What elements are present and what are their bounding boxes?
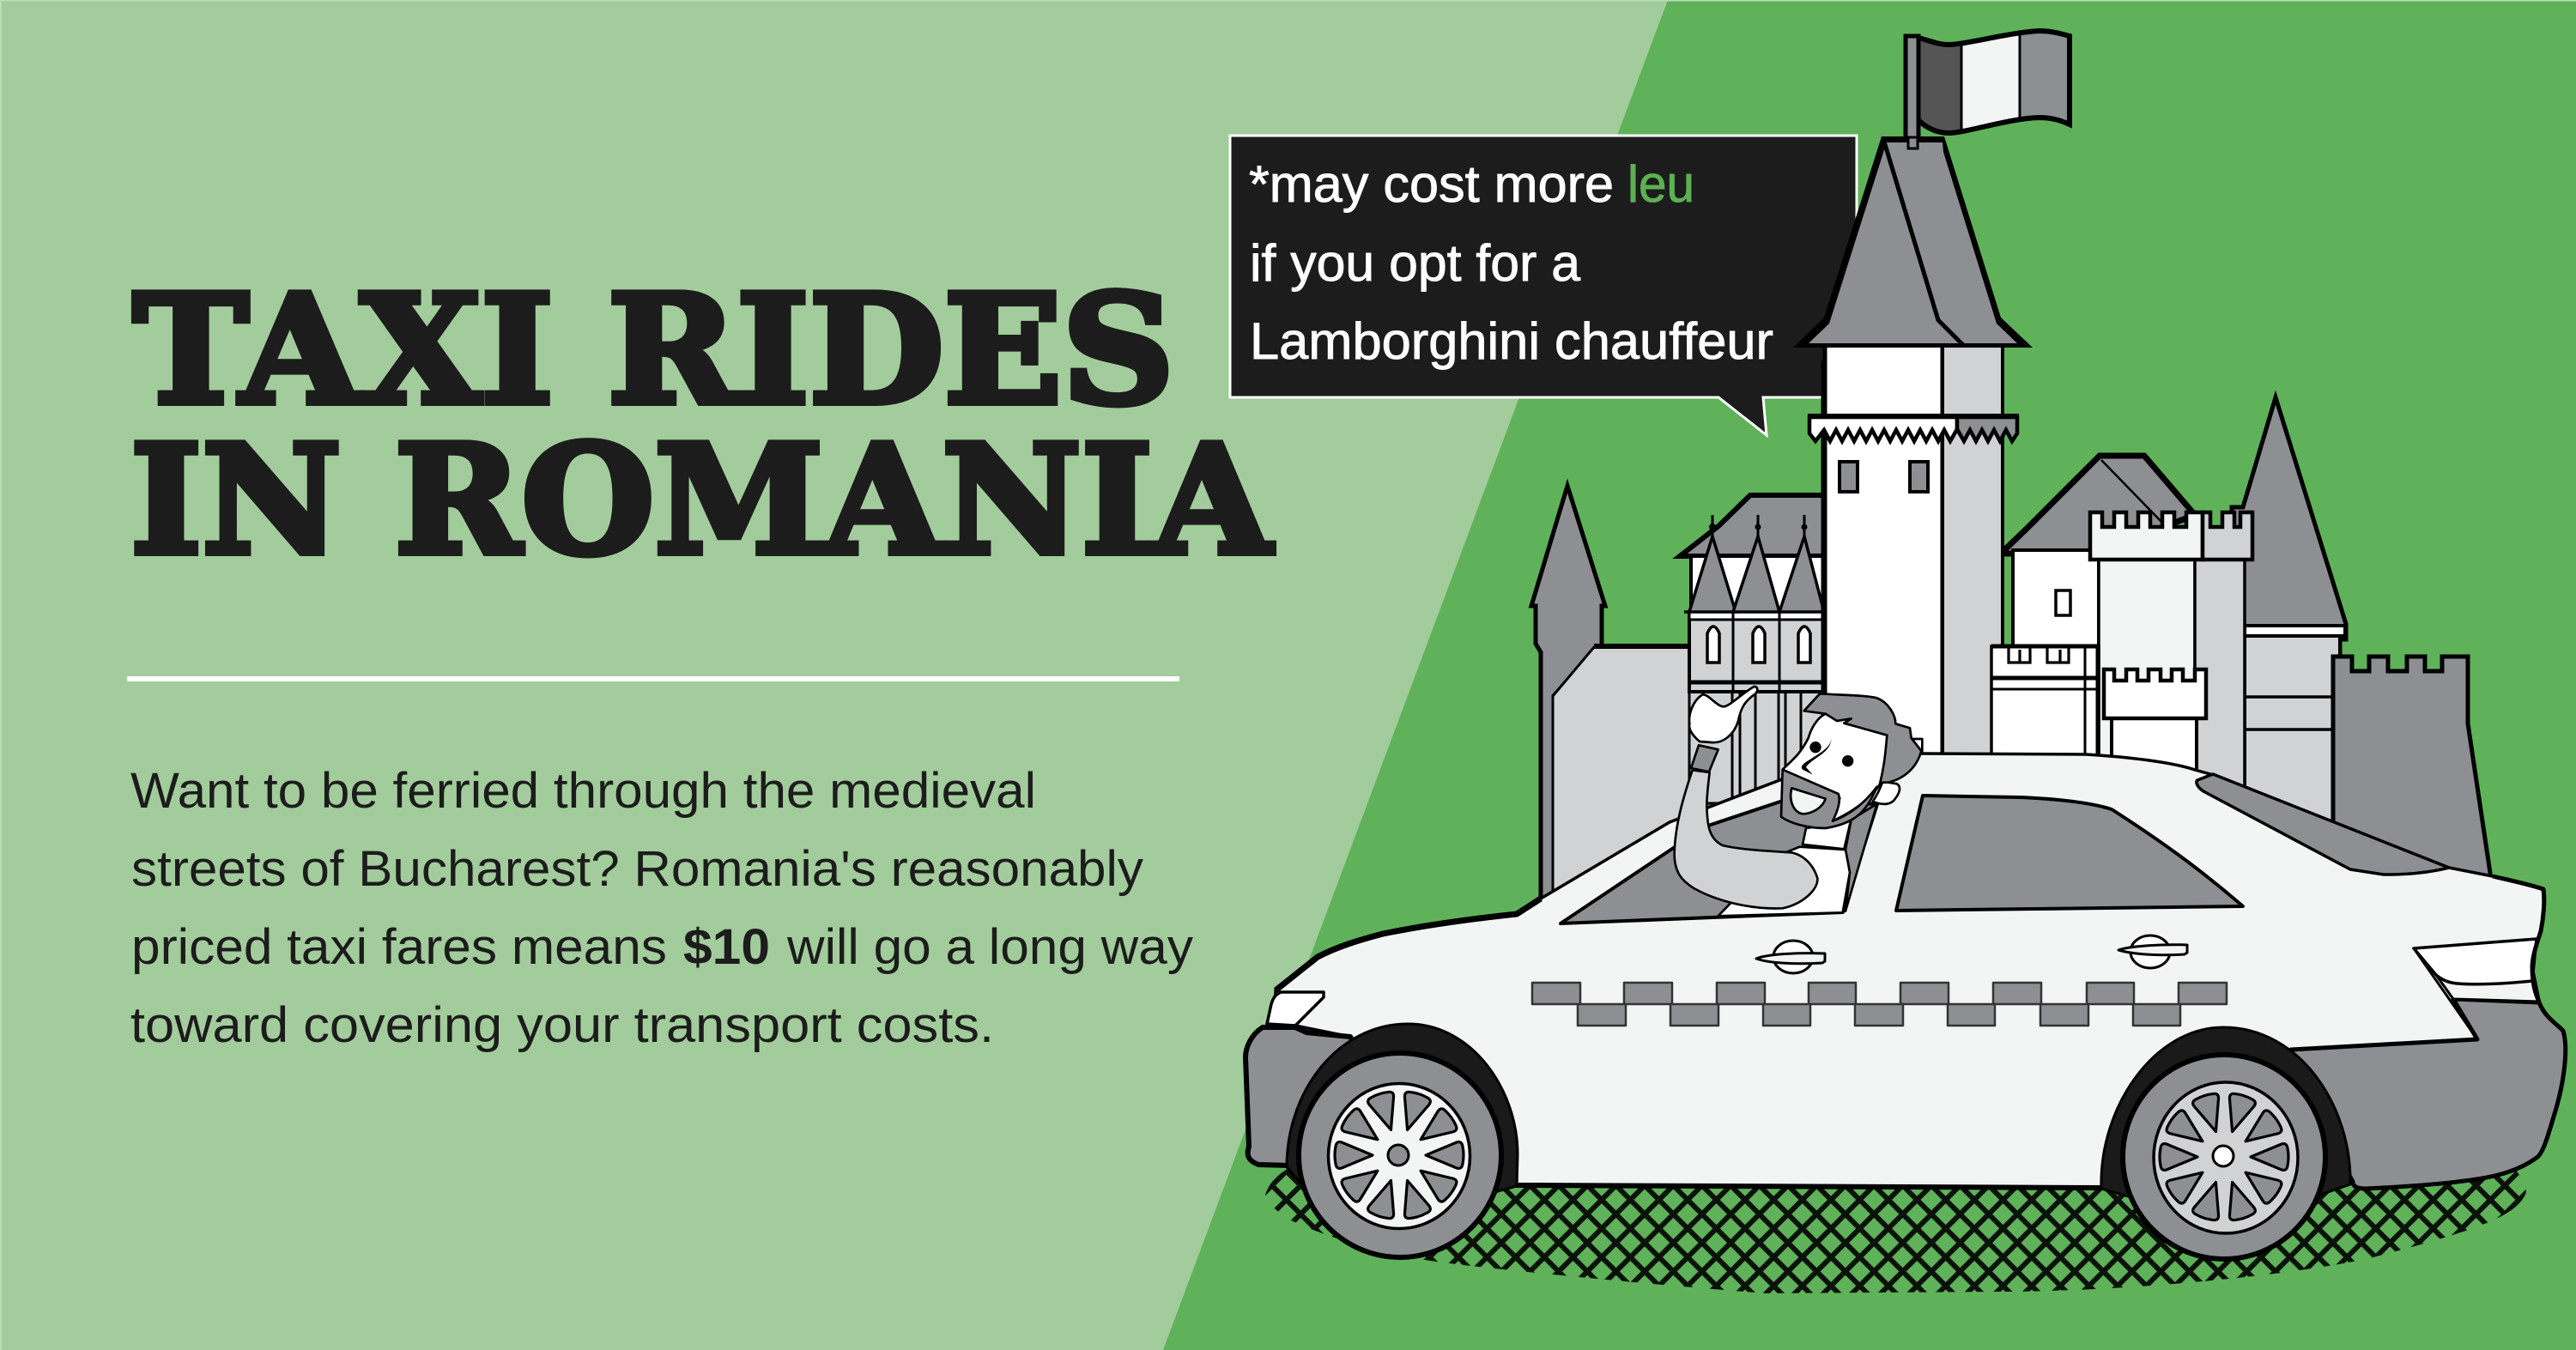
door handle rear — [2118, 935, 2187, 968]
callout — [1230, 136, 1857, 435]
seat — [1846, 804, 1877, 911]
small white crenellated turret — [2104, 669, 2206, 786]
face — [1783, 714, 1887, 821]
right wall band and lower wall — [2245, 626, 2345, 876]
castle — [1531, 31, 2490, 910]
car body — [1267, 754, 2544, 1187]
body text: toward covering your transport costs. — [130, 997, 994, 1053]
lower crenellated wall — [1991, 645, 2099, 772]
rear wheel arch — [2101, 1027, 2350, 1202]
ground hatch — [1262, 1167, 2532, 1296]
shirt — [1718, 847, 1850, 916]
body text: Want to be ferried through the medieval — [130, 763, 1036, 819]
body text: streets of Bucharest? Romania's reasonably — [131, 841, 1143, 897]
taxi car — [1246, 754, 2566, 1259]
body text: $10 — [683, 919, 770, 975]
body text — [130, 763, 1193, 1053]
crenellated shaft — [2090, 512, 2252, 800]
rear side window — [1896, 796, 2243, 911]
beard — [1781, 770, 1877, 828]
front wheel arch — [1287, 1024, 1518, 1202]
tower band — [1808, 416, 2019, 441]
columns — [1689, 692, 1824, 824]
three small turrets — [1684, 515, 1824, 692]
thumbs-up hand — [1689, 687, 1757, 742]
callout text: leu — [1627, 155, 1694, 213]
taxi checker stripe — [1532, 983, 2227, 1026]
rear wheel — [2123, 1055, 2325, 1259]
title: IN ROMANIA — [130, 413, 1273, 589]
flag pole and flag — [1906, 31, 2070, 148]
ear — [1873, 782, 1900, 804]
eyes — [1809, 742, 1853, 766]
right house wall — [2013, 550, 2099, 657]
central hall roof — [1680, 495, 1824, 556]
body text: priced taxi fares means — [131, 919, 667, 975]
headlight — [1267, 992, 1324, 1026]
front wheel — [1299, 1053, 1501, 1257]
left hall — [1553, 647, 1695, 893]
right dark crenellated tower — [2333, 657, 2490, 910]
arm — [1675, 770, 1817, 909]
door handle front — [1756, 941, 1825, 973]
car bottom edge fill — [1373, 1047, 2232, 1187]
rear edge outline — [2493, 876, 2544, 1002]
tower windows — [1840, 462, 1928, 492]
spoiler window — [2197, 774, 2449, 875]
tower roof — [1793, 136, 2033, 348]
callout text: Lamborghini chauffeur — [1250, 312, 1773, 370]
rear bumper — [2291, 999, 2566, 1189]
main tower body — [1823, 343, 2003, 772]
left spire — [1531, 486, 1605, 910]
neck — [1803, 821, 1851, 849]
tall right spire — [2232, 397, 2346, 858]
front bumper — [1246, 1027, 1373, 1165]
callout text — [1249, 155, 1773, 370]
front side window — [1561, 801, 1877, 923]
callout text: if you opt for a — [1250, 234, 1581, 292]
callout text: *may cost more — [1249, 155, 1614, 213]
hood outline — [1276, 899, 1541, 990]
central hall wall — [1691, 556, 1824, 616]
tail light — [2291, 939, 2539, 1050]
small window — [2056, 590, 2070, 615]
title — [130, 263, 1273, 589]
small window behind hair — [1912, 739, 1922, 753]
body text: will go a long way — [786, 919, 1193, 975]
mouth — [1791, 788, 1826, 814]
right house roof — [2004, 456, 2195, 554]
nose and brow — [1802, 737, 1832, 775]
wristband — [1691, 745, 1718, 772]
driver — [1675, 687, 1922, 916]
divider line — [127, 676, 1179, 681]
hair — [1804, 693, 1921, 783]
title: TAXI RIDES — [133, 263, 1174, 439]
